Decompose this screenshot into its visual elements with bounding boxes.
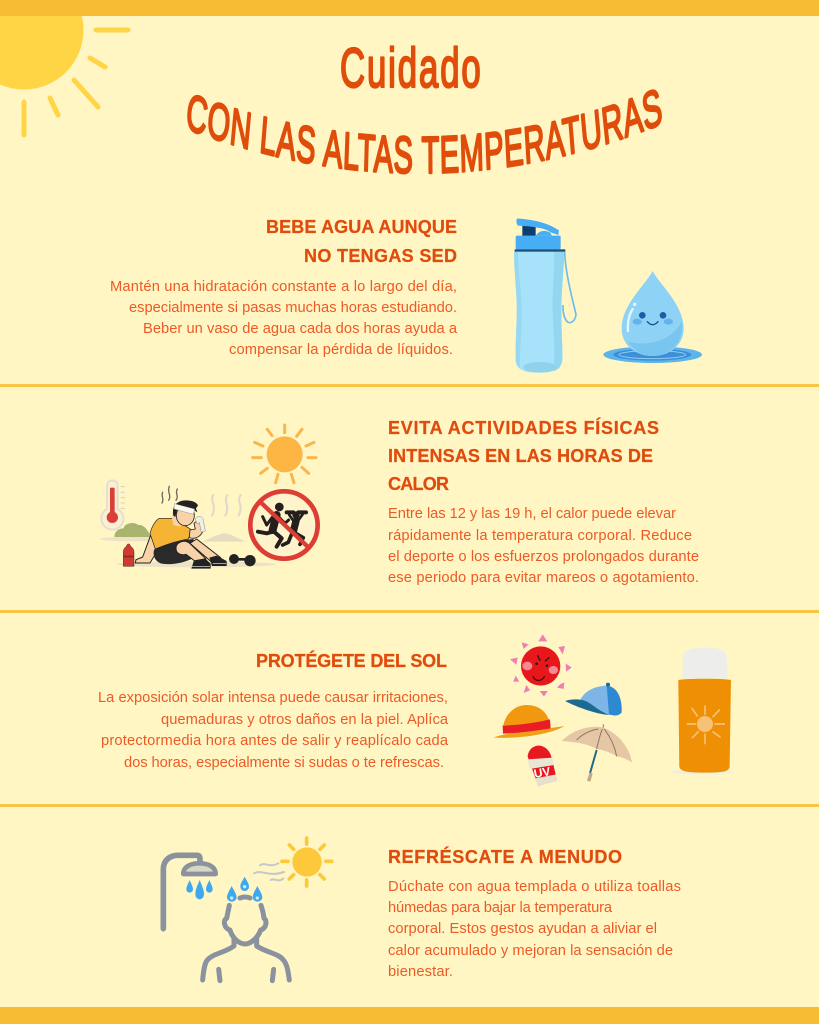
heading: evita actividades (388, 417, 659, 494)
icon: red sun (510, 634, 572, 697)
icon: person (203, 897, 289, 981)
text block: protección solar: protectormedia hora antes de salir y reaplícalo cada (101, 733, 449, 749)
icon: exhausted athlete scene (100, 425, 318, 569)
text block: hidratación: Mantén una hidratación constante a lo largo del día, (110, 279, 457, 295)
icon: heat waves (254, 863, 284, 880)
heading: bebe agua (266, 217, 457, 266)
icon: shower, head and sun (163, 838, 332, 981)
text block: refrescarse (388, 879, 681, 980)
heading: refréscate: REFRÉSCATE A MENUDO (388, 846, 622, 867)
panel: evita actividades (100, 417, 699, 586)
icon: orange sun (253, 425, 316, 483)
icon: sweat drops (227, 877, 262, 902)
icon: no-exercise sign (250, 491, 318, 559)
icon: dumbbell (229, 554, 256, 566)
text block: refrescarse: Dúchate con agua templada o utiliza toallas (388, 879, 681, 895)
heading: protégete: PROTÉGETE DEL SOL (256, 650, 447, 671)
heading: evita actividades: INTENSAS EN LAS HORAS DE (388, 446, 653, 466)
panel: refréscate (163, 838, 681, 981)
title: CON LAS ALTAS TEMPERATURAS (187, 89, 662, 174)
figure: athlete (135, 500, 227, 569)
icon: UV bottle (528, 746, 557, 786)
text block: hidratación: especialmente si pasas muchas horas estudiando. (129, 300, 457, 316)
icon: blue cap (565, 683, 622, 715)
bottom band (0, 1007, 819, 1024)
text block: deporte: ese periodo para evitar mareos o agotamiento. (388, 570, 699, 586)
icon: corner sun (0, 0, 128, 135)
icon: thermometer (101, 480, 125, 530)
heading: bebe agua: NO TENGAS SED (304, 246, 457, 266)
text block: deporte: el deporte o los esfuerzos prolongados durante (388, 549, 699, 565)
icon: sunscreen tube (670, 648, 735, 775)
icon: red bottle (123, 544, 134, 566)
heading: evita actividades: EVITA ACTIVIDADES FÍSICAS (388, 417, 659, 438)
text block: hidratación (110, 279, 458, 358)
text block: refrescarse: corporal. Estos gestos ayudan a aliviar el (388, 921, 657, 937)
heading: evita actividades: CALOR (388, 474, 449, 494)
icon: UV bottle: UV (533, 764, 552, 781)
icon: shower (163, 855, 216, 929)
icon: water drop (603, 271, 702, 363)
text block: hidratación: compensar la pérdida de líquidos. (229, 342, 453, 358)
icon: water bottle (514, 218, 576, 373)
panel: bebe agua (110, 217, 702, 373)
text block: refrescarse: bienestar. (388, 964, 453, 980)
top band (0, 0, 819, 16)
text block: hidratación: Beber un vaso de agua cada dos horas ayuda a (143, 321, 458, 337)
text block: protección solar: La exposición solar intensa puede causar irritaciones, (98, 690, 448, 706)
icon: straw hat (494, 705, 564, 738)
text block: protección solar: quemaduras y otros daños en la piel. Aplíca (161, 712, 449, 728)
text block: deporte (388, 506, 699, 586)
text block: protección solar (98, 690, 449, 771)
text block: deporte: Entre las 12 y las 19 h, el calor puede elevar (388, 506, 676, 522)
title: Cuidado (340, 37, 481, 99)
title (187, 37, 662, 174)
text block: protección solar: dos horas, especialmente si sudas o te refrescas. (124, 755, 444, 771)
text block: refrescarse: húmedas para bajar la temperatura (388, 900, 613, 916)
panel: protégete del sol (98, 634, 735, 786)
icon: sun protection items (494, 634, 735, 786)
icon: beige umbrella (562, 724, 632, 782)
heading: bebe agua: BEBE AGUA AUNQUE (266, 217, 457, 237)
text block: deporte: rápidamente la temperatura corporal. Reduce (388, 528, 692, 544)
text block: refrescarse: calor acumulado y mejoran la sensación de (388, 943, 673, 959)
icon: yellow sun (282, 838, 332, 886)
